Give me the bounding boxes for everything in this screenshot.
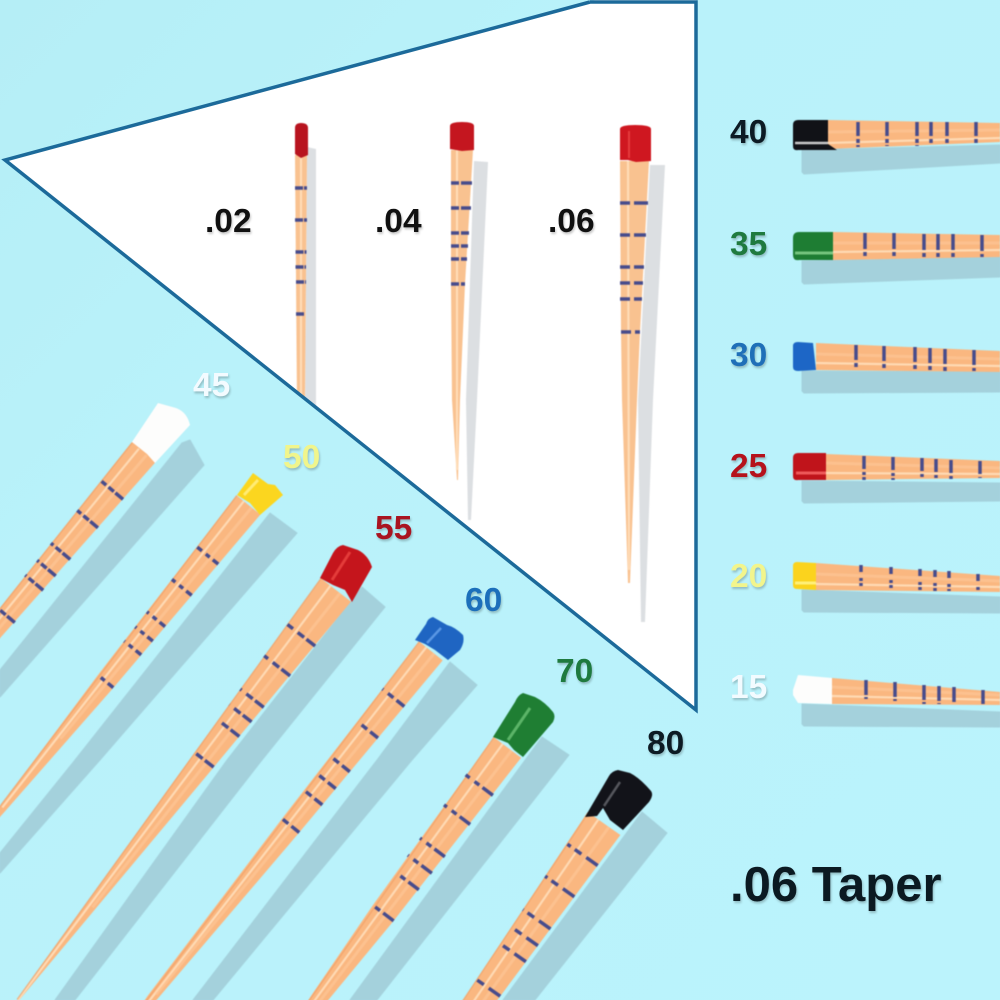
stick 70 green bbox=[287, 693, 569, 1000]
labels: taper values bbox=[205, 203, 595, 240]
stick 25 red bbox=[793, 453, 1000, 503]
label 30: 30 bbox=[730, 337, 767, 374]
triangle outline bbox=[5, 2, 696, 710]
stick 35 green bbox=[793, 232, 1000, 284]
label 55: 55 bbox=[375, 510, 412, 547]
stick 40 black bbox=[793, 120, 1000, 174]
group: diagonal sticks 45 to 80 bbox=[0, 367, 684, 1000]
stick 55 red bbox=[3, 545, 385, 1000]
stick: .06 taper bbox=[620, 125, 665, 622]
labels: taper values: .02 bbox=[205, 203, 252, 240]
stick: .02 taper bbox=[295, 123, 316, 420]
label 35: 35 bbox=[730, 226, 767, 263]
label 70: 70 bbox=[556, 653, 593, 690]
stick: .04 taper bbox=[450, 122, 488, 520]
label 40: 40 bbox=[730, 114, 767, 151]
panel: white taper comparison triangle bbox=[5, 0, 696, 710]
label 60: 60 bbox=[465, 582, 502, 619]
stick 15 white bbox=[793, 675, 1000, 727]
stick 80 black bbox=[444, 770, 667, 1000]
label 20: 20 bbox=[730, 558, 767, 595]
label 45: 45 bbox=[193, 367, 230, 404]
label 50: 50 bbox=[283, 439, 320, 476]
labels: taper values: .04 bbox=[375, 203, 422, 240]
labels: taper values: .06 bbox=[548, 203, 595, 240]
stick 20 yellow bbox=[793, 562, 1000, 613]
stick 30 blue bbox=[793, 342, 1000, 393]
stick 50 yellow bbox=[0, 473, 297, 873]
group: horizontal sticks 15 to 40 bbox=[730, 114, 1000, 727]
label 80: 80 bbox=[647, 725, 684, 762]
comparison sticks bbox=[295, 122, 665, 622]
stick 45 white bbox=[0, 403, 204, 697]
title: .06 Taper: .06 Taper bbox=[730, 858, 942, 912]
label 15: 15 bbox=[730, 669, 767, 706]
label 25: 25 bbox=[730, 448, 767, 485]
stick 60 blue bbox=[119, 617, 477, 1000]
